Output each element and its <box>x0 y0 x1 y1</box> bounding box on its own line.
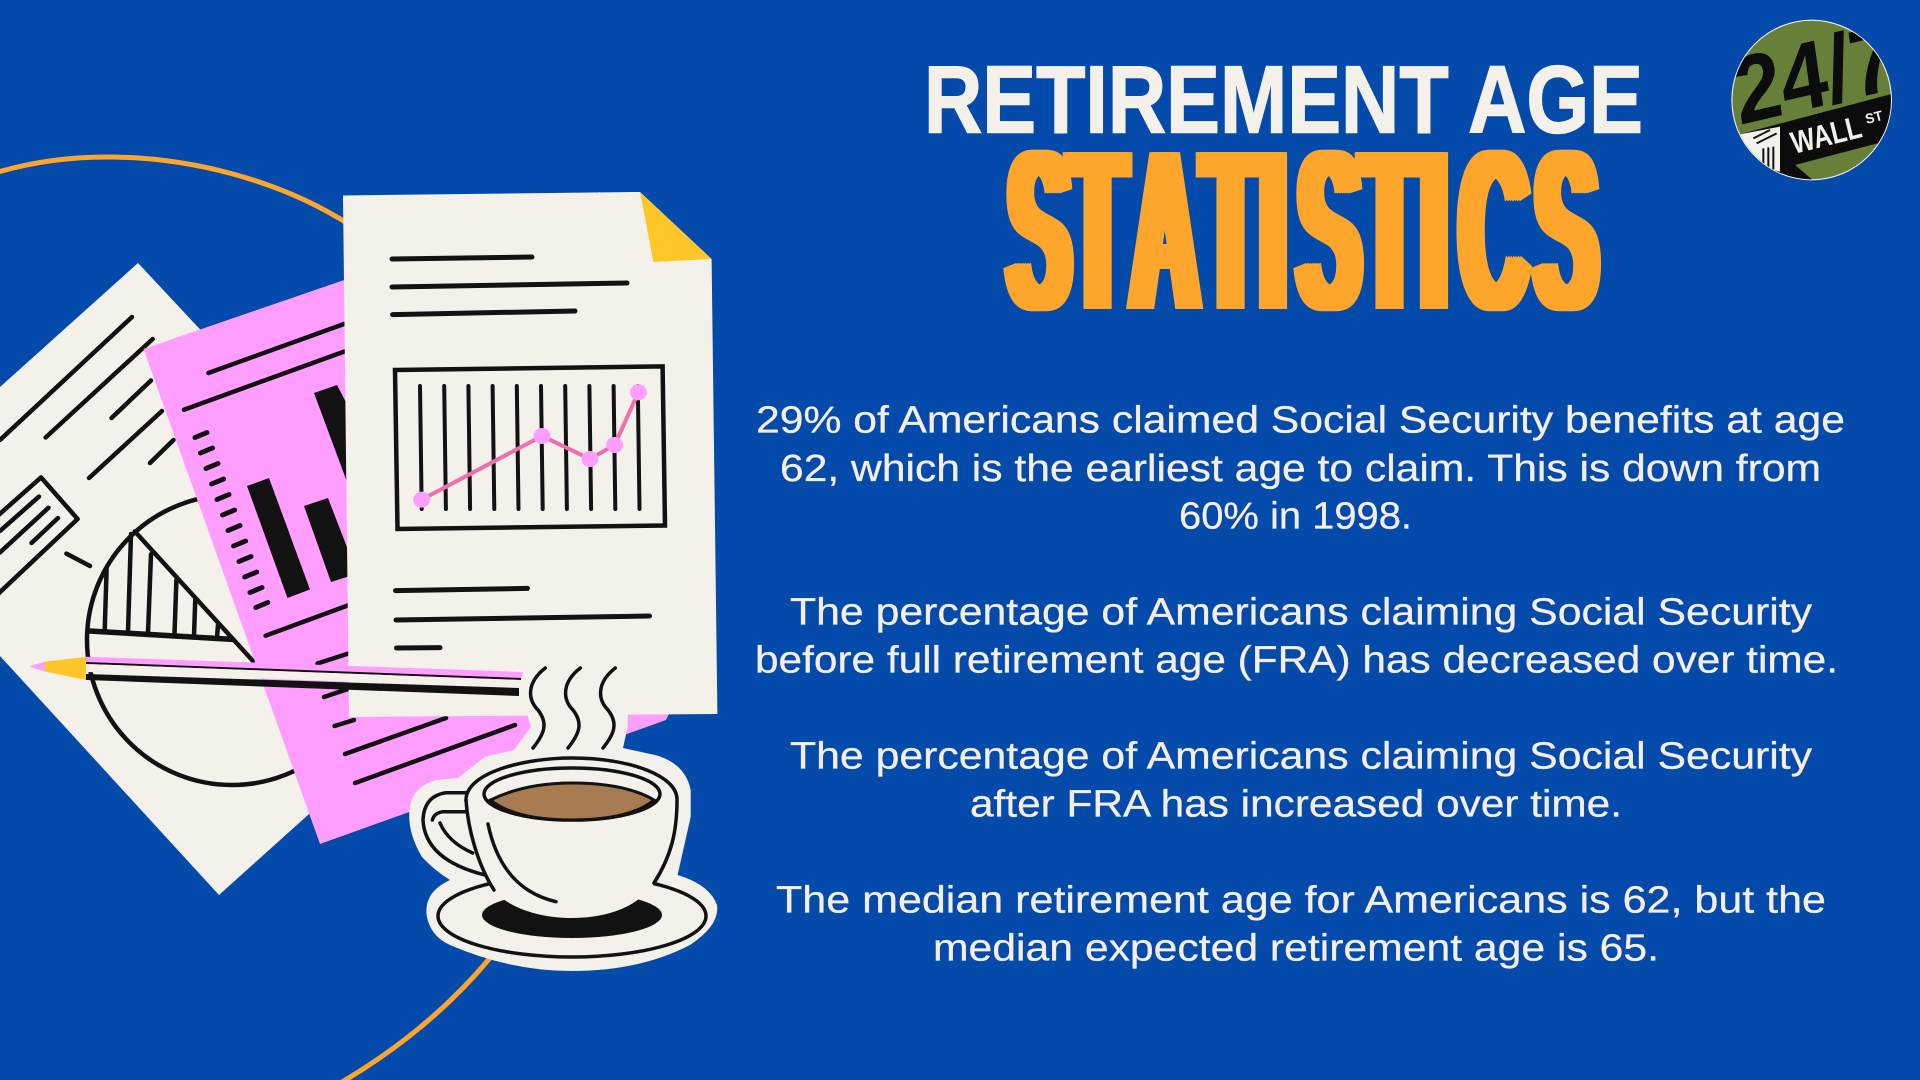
fact: early claims: 60% in 1998. <box>1179 495 1412 537</box>
fact: median retirement age: median expected retirement age is 65. <box>933 928 1659 970</box>
title line: statistics: S <box>1298 104 1360 358</box>
body text <box>755 400 1845 970</box>
fact: early claims <box>756 400 1845 537</box>
fact: claiming before FRA <box>755 592 1838 682</box>
document: front page with line chart <box>343 192 717 717</box>
title line: statistics: I <box>1421 104 1447 358</box>
title line: statistics: S <box>1535 104 1597 358</box>
title line: statistics: I <box>1260 104 1286 358</box>
illustration: documents, pencil and coffee <box>0 192 717 971</box>
fact: claiming before FRA: before full retirement age (FRA) has decreased over time. <box>755 640 1838 682</box>
steam <box>531 668 615 748</box>
icon: coffee cup <box>409 668 717 971</box>
logo: 24/7 Wall St: WALL <box>1787 109 1865 161</box>
line chart <box>395 366 665 529</box>
title line: statistics: T <box>1202 104 1259 358</box>
fact: early claims: 29% of Americans claimed Social Security benefits at age <box>756 400 1845 442</box>
logo: 24/7 Wall St <box>1731 20 1892 180</box>
saucer <box>438 875 706 957</box>
title line: statistics: C <box>1460 104 1527 358</box>
fact: claiming after FRA: The percentage of Americans claiming Social Security <box>790 736 1812 778</box>
document: pink page with bar chart <box>144 192 670 844</box>
fact: claiming after FRA <box>790 736 1812 826</box>
logo: 24/7 Wall St: ST <box>1864 107 1885 127</box>
fact: claiming before FRA: The percentage of Americans claiming Social Security <box>790 592 1812 634</box>
title line: statistics: T <box>1068 104 1126 358</box>
cup body <box>466 758 677 918</box>
handle <box>423 793 485 875</box>
title line: statistics <box>1003 104 1602 358</box>
title line: statistics: T <box>1360 104 1418 358</box>
title line: retirement age: RETIREMENT AGE <box>924 47 1643 154</box>
orange decorative arc <box>0 157 490 1080</box>
title line: statistics: A <box>1130 104 1198 358</box>
fact: median retirement age <box>776 880 1826 970</box>
document: white page with pie chart <box>0 263 496 895</box>
fact: claiming after FRA: after FRA has increased over time. <box>970 784 1622 826</box>
pencil <box>29 657 524 696</box>
fact: median retirement age: The median retirement age for Americans is 62, but the <box>776 880 1826 922</box>
logo numerals: 24/7 <box>1727 4 1903 146</box>
fact: early claims: 62, which is the earliest age to claim. This is down from <box>780 448 1821 490</box>
title line: statistics: S <box>1008 104 1070 358</box>
